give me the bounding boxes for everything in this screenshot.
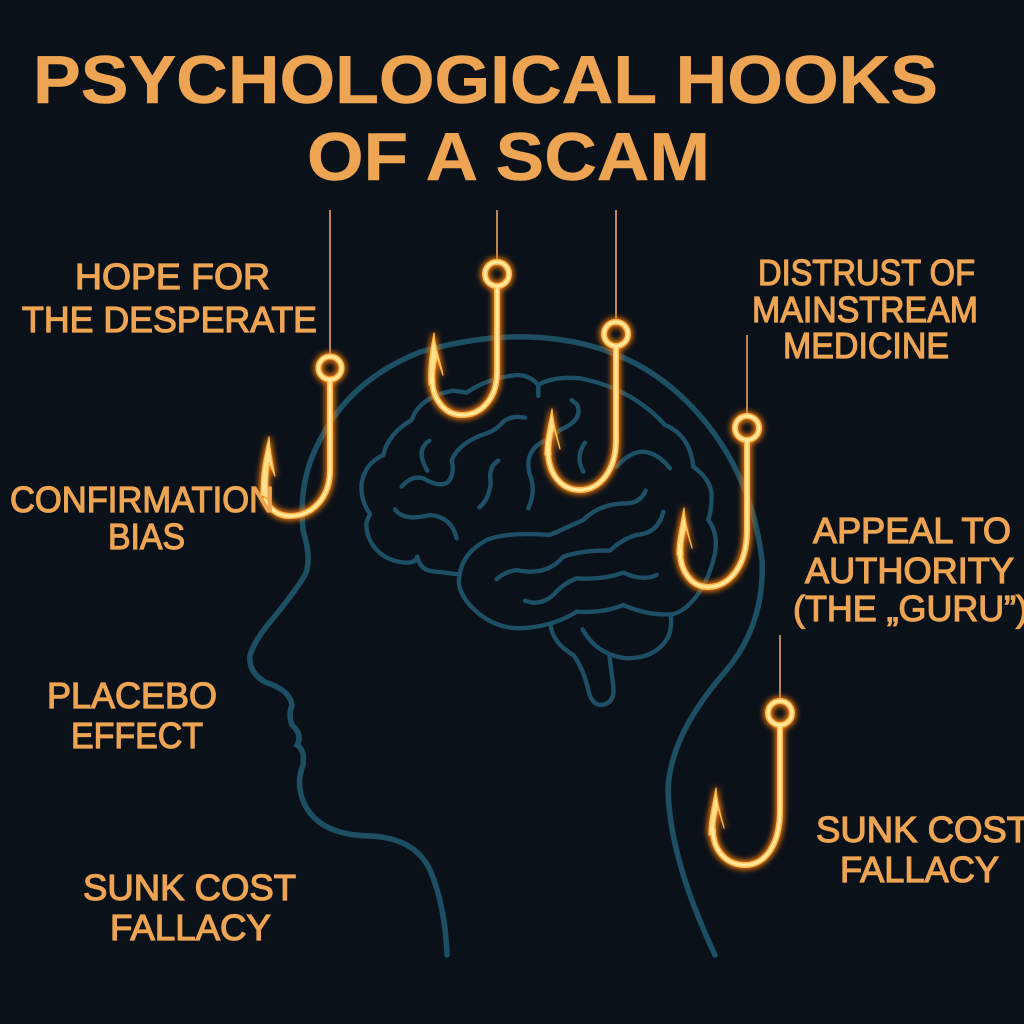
label: sunk cost fallacy (right): FALLACY <box>840 849 999 890</box>
label: placebo effect: EFFECT <box>71 715 203 756</box>
hook 4 <box>677 335 759 587</box>
brain folds <box>395 385 670 603</box>
brain line drawing <box>361 375 716 705</box>
title <box>33 42 938 195</box>
label: appeal to authority <box>793 510 1024 629</box>
brain outer contour <box>361 375 716 628</box>
label: placebo effect: PLACEBO <box>47 675 217 716</box>
label: hope for the desperate: HOPE FOR <box>75 256 270 297</box>
hook 3 <box>545 210 628 490</box>
label: sunk cost fallacy (left): FALLACY <box>110 907 271 948</box>
label: hope for the desperate <box>22 256 317 340</box>
label: distrust of mainstream medicine <box>752 252 978 366</box>
label: sunk cost fallacy (right): SUNK COST <box>816 809 1024 850</box>
label: sunk cost fallacy (left) <box>83 867 296 948</box>
cerebellum and brain stem <box>551 615 671 705</box>
label: appeal to authority: (THE „GURU”) <box>793 588 1024 629</box>
title: PSYCHOLOGICAL HOOKS <box>33 42 938 118</box>
hook 2 <box>429 210 509 415</box>
label: appeal to authority: AUTHORITY <box>805 550 1014 591</box>
label: appeal to authority: APPEAL TO <box>813 510 1011 551</box>
label: distrust of mainstream medicine: DISTRUST OF <box>758 252 975 293</box>
label: distrust of mainstream medicine: MEDICINE <box>783 325 949 366</box>
label: sunk cost fallacy (right) <box>816 809 1024 890</box>
head silhouette outline <box>250 337 762 955</box>
label: confirmation bias <box>10 479 274 557</box>
label: placebo effect <box>47 675 217 756</box>
hook 1 <box>261 210 342 516</box>
label: distrust of mainstream medicine: MAINSTREAM <box>752 289 978 330</box>
title: OF A SCAM <box>307 119 710 195</box>
label: confirmation bias: BIAS <box>108 516 185 557</box>
label: sunk cost fallacy (left): SUNK COST <box>83 867 296 908</box>
label: confirmation bias: CONFIRMATION <box>10 479 274 520</box>
label: hope for the desperate: THE DESPERATE <box>22 299 317 340</box>
hook 5 <box>709 635 792 865</box>
